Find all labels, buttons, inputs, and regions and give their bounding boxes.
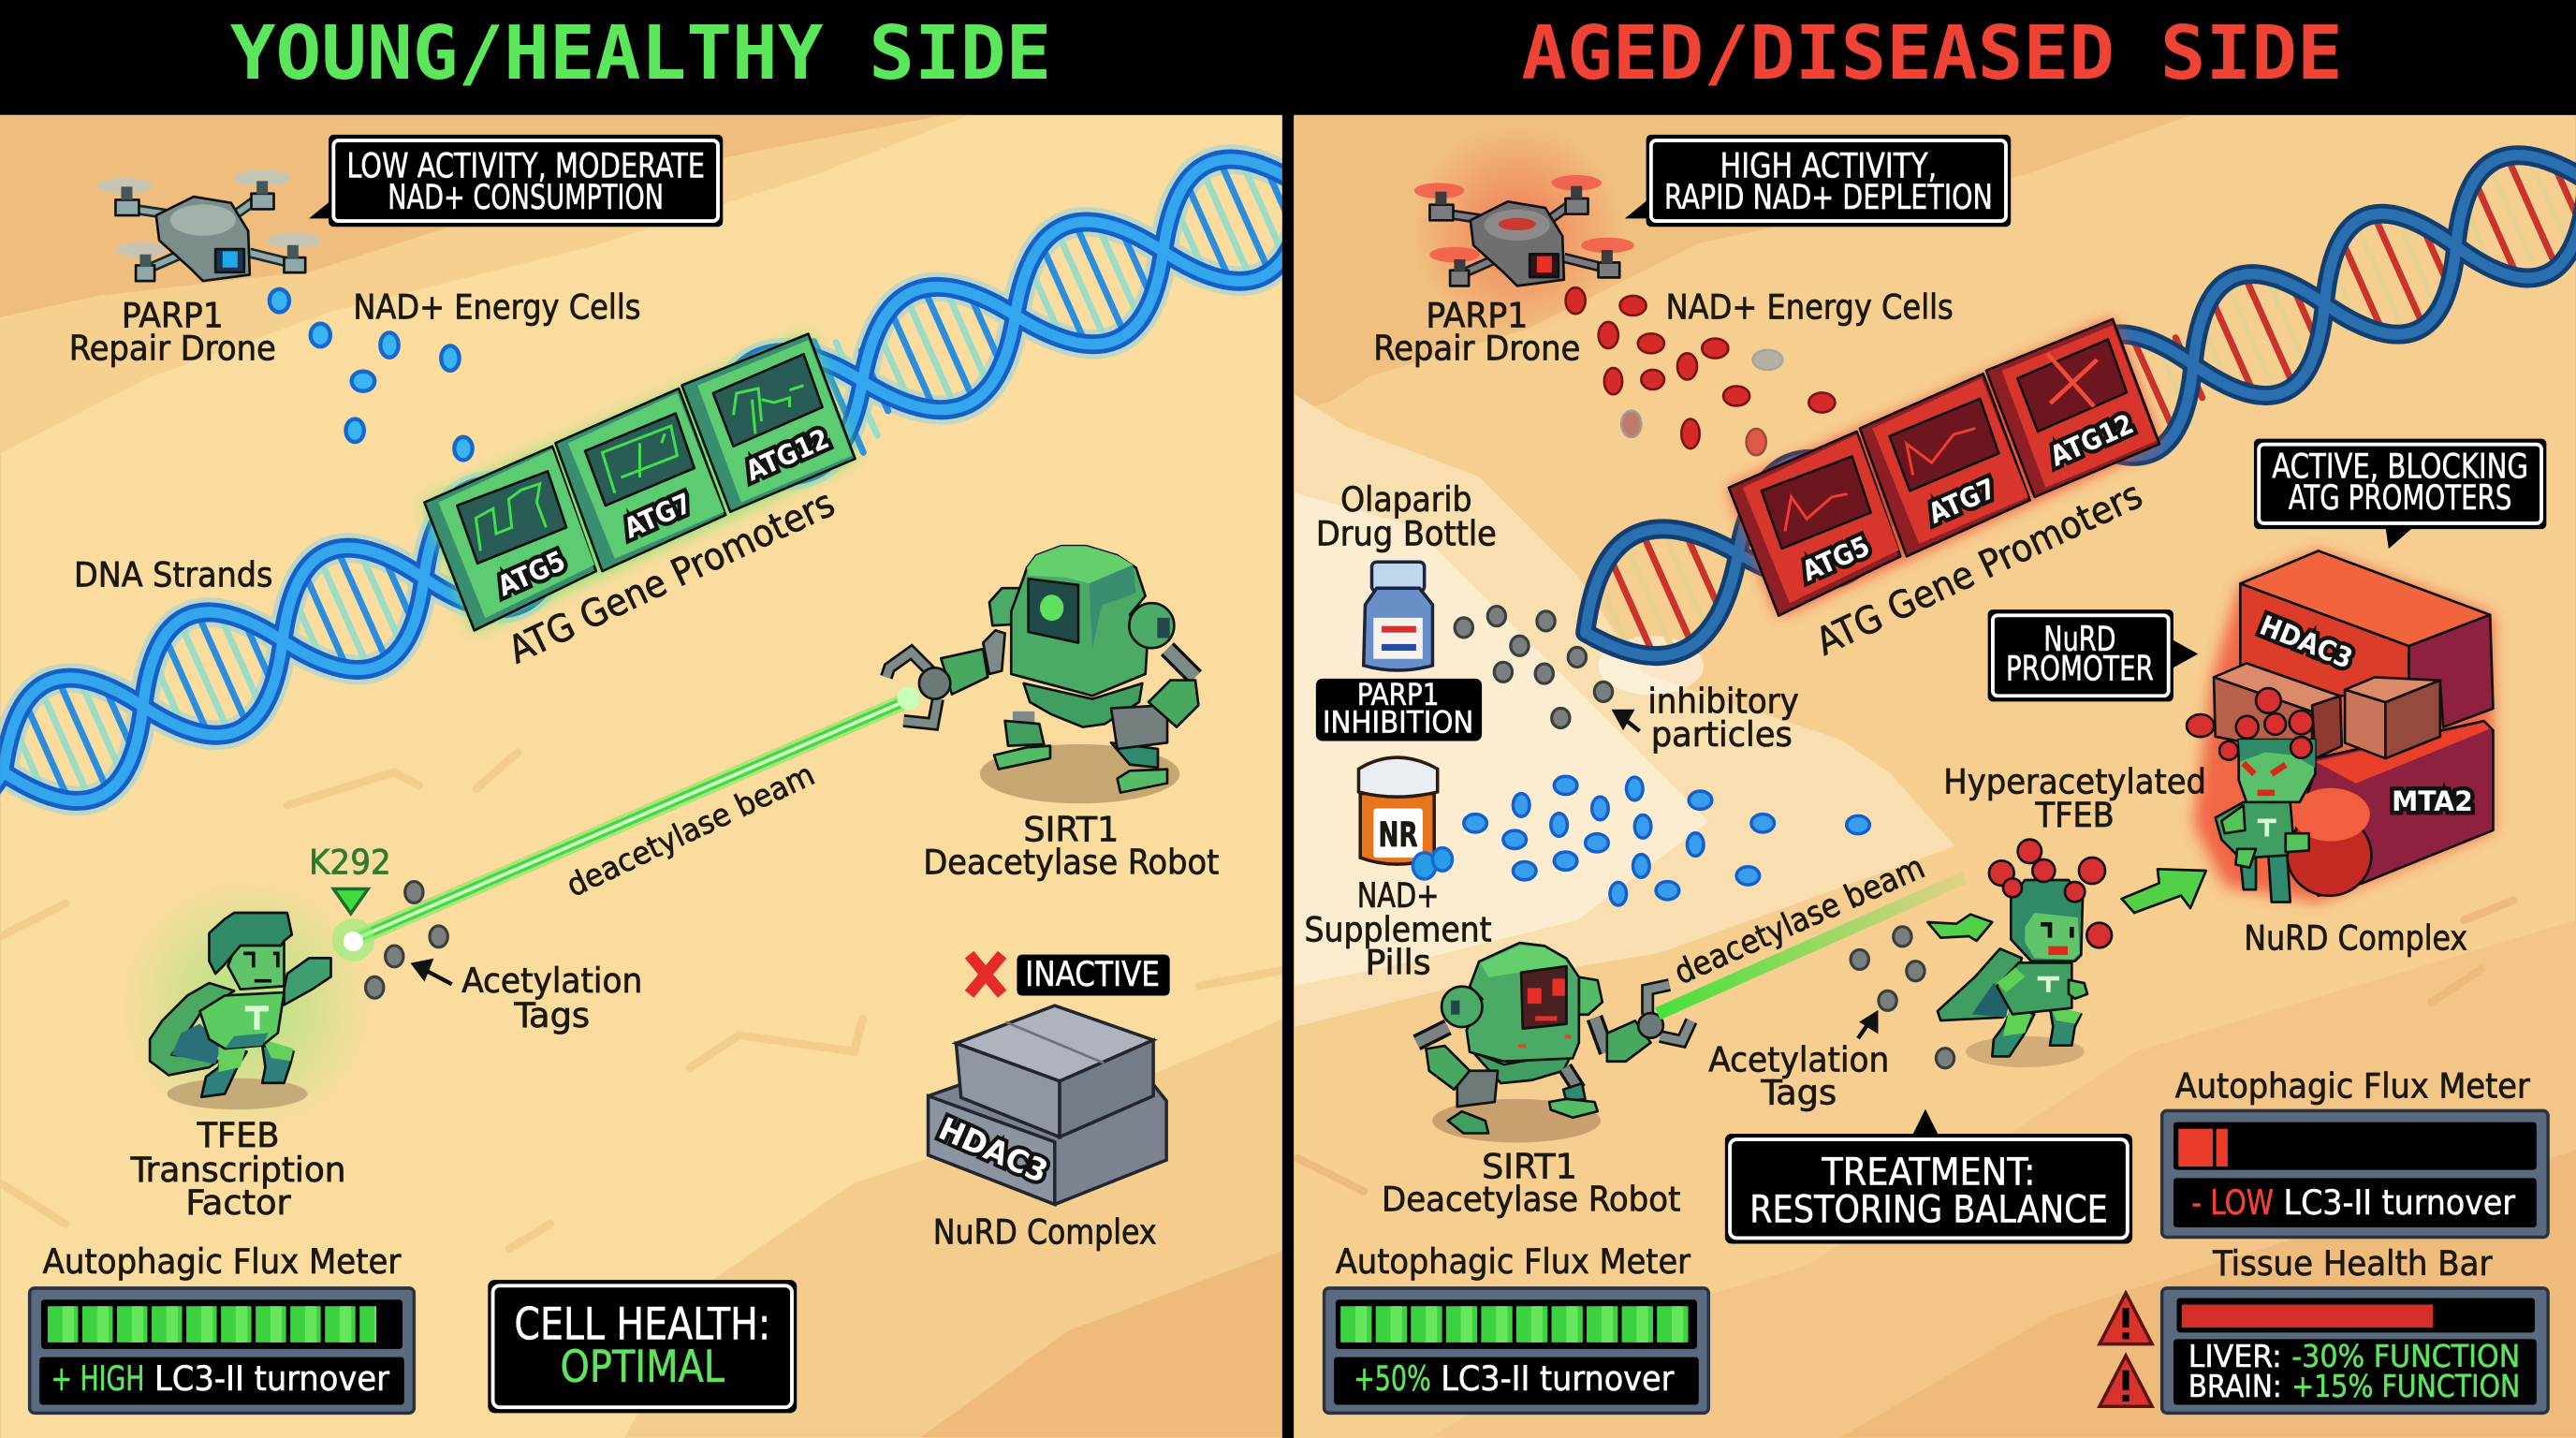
robot: SIRT1 diseased: [1416, 943, 1691, 1142]
label: deacetylase beam diseased: deacetylase beam: [1669, 848, 1930, 992]
callout: treatment: TREATMENT:: [1821, 1150, 2036, 1194]
label: NAD+ supplement pills: [1305, 875, 1492, 983]
label: inhibitory particles: [1647, 682, 1799, 755]
label: ATG Gene Promoters diseased: ATG Gene Promoters: [1809, 473, 2149, 665]
NR blue pills: [1464, 776, 1869, 905]
panel: young/healthy background: [0, 115, 1288, 1438]
label: acetylation tags diseased: [1708, 1039, 1889, 1112]
NuRD complex active with trapped TFEB: [2187, 550, 2493, 902]
label: NuRD complex diseased: NuRD Complex: [2244, 917, 2467, 958]
arrow to acetylation tags: [414, 961, 452, 984]
label: PARP1 repair drone: Repair Drone: [69, 328, 276, 368]
NuRD complex inactive: [929, 1005, 1166, 1204]
DNA strands, healthy, lower left: [0, 486, 567, 841]
meter: low flux: LC3-II turnover: [2284, 1182, 2515, 1223]
label: inhibitory particles: particles: [1651, 714, 1793, 755]
label: NAD+ energy cells diseased: NAD+ Energy Cells: [1666, 286, 1954, 327]
arrow: green to TFEB: [1927, 915, 1992, 941]
ATG promoter blocks, diseased: ATG7: [1924, 472, 2000, 530]
callout: high activity: RAPID NAD+ DEPLETION: [1664, 177, 1993, 217]
impact at claw: [897, 687, 920, 710]
label: Olaparib drug bottle: Olaparib: [1340, 479, 1472, 520]
ATG promoter blocks, healthy: ATG12: [741, 422, 834, 487]
NuRD complex inactive: HDAC3: [933, 1110, 1053, 1190]
callout: treatment: RESTORING BALANCE: [1749, 1188, 2108, 1232]
label: SIRT1 deacetylase robot: SIRT1: [1023, 810, 1119, 850]
label: SIRT1 deacetylase robot: [923, 810, 1219, 883]
label: acetylation tags: Acetylation: [461, 961, 642, 1001]
label: ATG Gene Promoters healthy: ATG Gene Promoters: [502, 481, 842, 672]
label: TFEB transcription factor: Factor: [185, 1182, 291, 1223]
hero: TFEB healthy: [122, 880, 372, 1130]
icon: PARP1 repair drone, healthy: [96, 170, 320, 281]
label: inhibitory particles: inhibitory: [1647, 682, 1799, 722]
label: NAD+ supplement pills: Pills: [1365, 943, 1431, 983]
label: TFEB transcription factor: TFEB: [197, 1115, 279, 1155]
label: TFEB transcription factor: [130, 1115, 345, 1223]
meter: low flux: [2162, 1110, 2548, 1238]
icon: NR supplement bottle: NR: [1379, 814, 1418, 855]
meter: tissue health: -30% FUNCTION: [2291, 1338, 2520, 1374]
meter: low flux: - LOW: [2191, 1182, 2274, 1223]
label: hyperacetylated TFEB: [1943, 762, 2206, 835]
meter: healthy flux: LC3-II turnover: [154, 1358, 389, 1399]
meter: healthy flux: + HIGH: [51, 1358, 145, 1399]
NuRD complex active with trapped TFEB: HDAC3: [2256, 609, 2357, 675]
depleted NAD+ cells: [1566, 287, 1835, 455]
DNA strands, healthy, upper right: [710, 144, 1306, 477]
badge: PARP1 inhibition: PARP1: [1357, 679, 1439, 712]
label: acetylation tags diseased: Acetylation: [1708, 1039, 1889, 1079]
badge: PARP1 inhibition: INHIBITION: [1323, 707, 1473, 741]
inactive badge: INACTIVE: [1025, 954, 1160, 994]
meter: treated flux: [1325, 1288, 1708, 1413]
hero: hyperacetylated TFEB: [1938, 840, 2112, 1067]
meter: tissue health: +15% FUNCTION: [2291, 1368, 2520, 1404]
meter: tissue health: LIVER:: [2188, 1338, 2282, 1374]
ATG promoter blocks, diseased: [1729, 319, 2159, 616]
arrow to acetylation tags diseased: [1858, 1014, 1876, 1038]
status: cell health optimal: CELL HEALTH:: [514, 1299, 770, 1350]
callout: high activity: HIGH ACTIVITY,: [1720, 146, 1937, 186]
acetylation tags healthy: [366, 882, 447, 998]
beam: deacetylase healthy: [353, 698, 912, 940]
title: aged/diseased side: AGED/DISEASED SIDE: [1521, 10, 2343, 96]
title: young/healthy side: YOUNG/HEALTHY SIDE: [230, 10, 1051, 96]
label: acetylation tags: [461, 961, 642, 1035]
header bar: [0, 0, 2576, 114]
callout: NuRD promoter: [1988, 609, 2198, 701]
label: autophagic flux meter, treated: Autophagic Flux Meter: [1336, 1241, 1690, 1282]
callout: active blocking: [2254, 439, 2546, 549]
meter: healthy flux: [30, 1288, 414, 1413]
label: autophagic flux meter: Autophagic Flux Meter: [43, 1241, 402, 1282]
status: cell health optimal: [488, 1280, 797, 1413]
label: hyperacetylated TFEB: Hyperacetylated: [1943, 762, 2206, 802]
inactive badge: [970, 954, 1170, 996]
callout: low activity: NAD+ CONSUMPTION: [388, 177, 664, 217]
callout: NuRD promoter: PROMOTER: [2006, 649, 2154, 689]
label: NAD+ energy cells: NAD+ Energy Cells: [353, 286, 641, 327]
callout: active blocking: ATG PROMOTERS: [2289, 477, 2511, 518]
label: autophagic flux meter, diseased: Autophagic Flux Meter: [2175, 1065, 2530, 1106]
meter: treated flux: LC3-II turnover: [1441, 1358, 1675, 1399]
label: acetylation tags: Tags: [513, 995, 590, 1035]
callout: high activity: [1625, 135, 2011, 227]
callout: low activity: LOW ACTIVITY, MODERATE: [346, 146, 705, 186]
icon: NR supplement bottle: [1358, 757, 1453, 879]
ATG promoter blocks, diseased: ATG5: [1797, 530, 1874, 588]
K292 marker: K292: [309, 843, 391, 883]
status: cell health optimal: OPTIMAL: [561, 1342, 724, 1393]
label: SIRT1 deacetylase robot diseased: Deacetylase Robot: [1382, 1179, 1680, 1219]
ATG promoter blocks, healthy: ATG7: [620, 487, 696, 545]
impact sparkle: [332, 918, 374, 961]
panel: aged/diseased background: [1288, 115, 2576, 1438]
label: NAD+ supplement pills: Supplement: [1305, 910, 1492, 950]
badge: PARP1 inhibition: [1316, 679, 1482, 741]
label: hyperacetylated TFEB: TFEB: [2035, 795, 2115, 835]
meter: treated flux: +50%: [1354, 1358, 1431, 1399]
DNA, diseased, upper right: [2062, 138, 2576, 463]
callout: treatment: [1725, 1109, 2132, 1244]
label: deacetylase beam: deacetylase beam: [561, 756, 820, 904]
K292 marker: [309, 843, 391, 914]
label: SIRT1 deacetylase robot diseased: [1382, 1146, 1680, 1219]
meter: tissue health: [2162, 1288, 2548, 1413]
inhibitory particles: [1455, 607, 1613, 727]
center divider: [1282, 0, 1294, 1438]
label: acetylation tags diseased: Tags: [1760, 1072, 1837, 1112]
ATG promoter blocks, healthy: [424, 334, 856, 630]
icon: PARP1 repair drone, diseased: [1411, 124, 1634, 336]
arrow to inhibitory particles: [1615, 712, 1640, 731]
label: TFEB transcription factor: Transcription: [130, 1150, 345, 1190]
label: DNA strands: DNA Strands: [74, 555, 272, 595]
icon: warning triangles: [2100, 1293, 2152, 1406]
beam: deacetylase diseased: [1658, 877, 1965, 1014]
label: Olaparib drug bottle: [1316, 479, 1497, 554]
label: tissue health bar: Tissue Health Bar: [2212, 1243, 2493, 1284]
label: NuRD complex: NuRD Complex: [933, 1212, 1157, 1253]
ATG promoter blocks, diseased: ATG12: [2045, 408, 2138, 473]
label: PARP1 repair drone diseased: PARP1: [1426, 295, 1528, 335]
robot: SIRT1 healthy: [886, 546, 1198, 803]
label: SIRT1 deacetylase robot diseased: SIRT1: [1482, 1146, 1577, 1186]
label: SIRT1 deacetylase robot: Deacetylase Robot: [923, 843, 1219, 883]
label: PARP1 repair drone diseased: Repair Drone: [1373, 328, 1580, 368]
acetylation tags diseased: [1851, 927, 1954, 1068]
label: PARP1 repair drone diseased: [1373, 295, 1580, 368]
NAD+ energy cells, healthy: [270, 289, 473, 460]
callout: low activity: [309, 135, 723, 227]
callout: active blocking: ACTIVE, BLOCKING: [2272, 447, 2528, 487]
arrow: green to NuRD: [2122, 869, 2206, 913]
label: PARP1 repair drone: [69, 295, 276, 368]
label: Olaparib drug bottle: Drug Bottle: [1316, 514, 1497, 554]
NuRD complex active with trapped TFEB: MTA2: [2392, 785, 2473, 817]
label: PARP1 repair drone: PARP1: [122, 295, 224, 335]
label: NAD+ supplement pills: NAD+: [1357, 875, 1439, 916]
DNA, diseased, lower lobe: [1586, 459, 1889, 695]
callout: NuRD promoter: NuRD: [2043, 619, 2116, 659]
ATG promoter blocks, healthy: ATG5: [493, 545, 570, 602]
icon: Olaparib bottle: [1364, 562, 1432, 670]
meter: tissue health: BRAIN:: [2188, 1368, 2282, 1404]
